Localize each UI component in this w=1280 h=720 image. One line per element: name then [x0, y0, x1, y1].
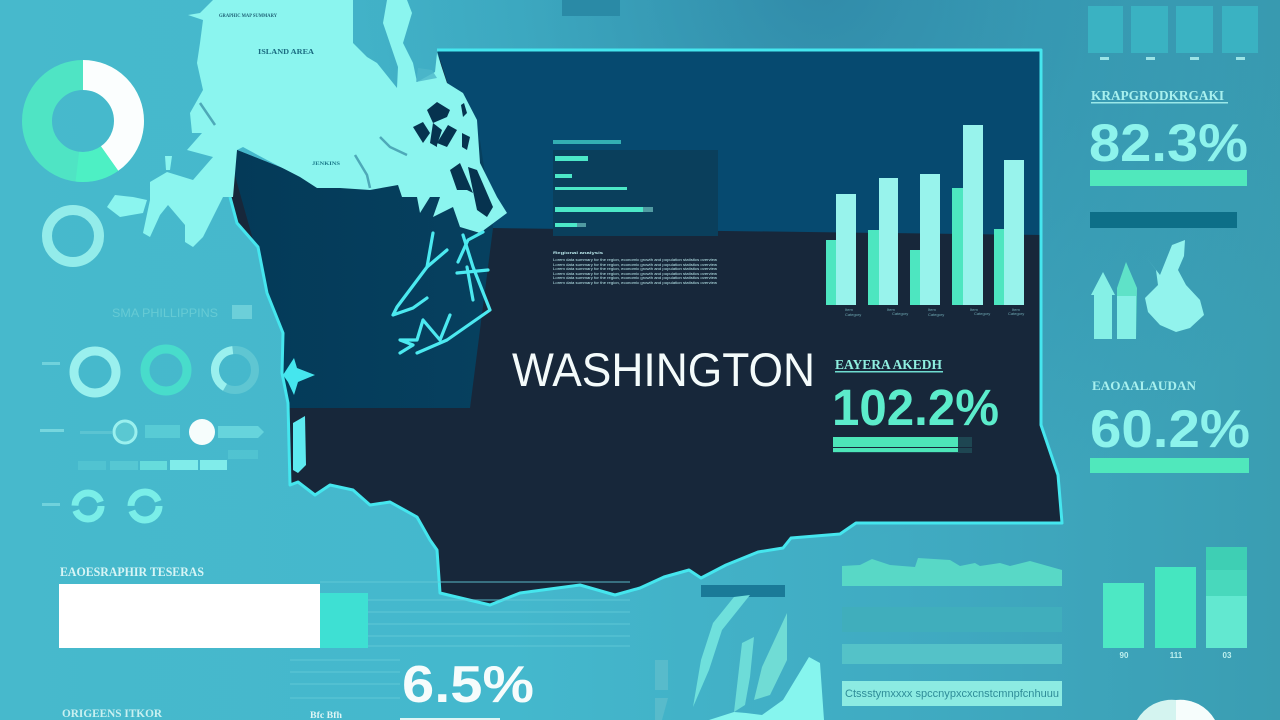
stat label: KRAPGRODKRGAKI — [1091, 89, 1224, 104]
stat value: 102.2% — [832, 379, 999, 436]
donut: large — [37, 75, 129, 167]
map region: west blue — [225, 140, 493, 408]
section heading left — [112, 305, 252, 320]
paragraph text: Lorem data summary for the region, economic growth and population statistics overview — [553, 281, 717, 285]
bar chart axis labels — [845, 307, 1024, 317]
stat bar — [833, 437, 972, 453]
teal bar — [320, 593, 368, 648]
paragraph text: Lorem data summary for the region, economic growth and population statistics overview — [553, 263, 717, 267]
label bar — [701, 585, 785, 597]
bar chart axis labels: Item — [887, 307, 895, 312]
paragraph text: Lorem data summary for the region, economic growth and population statistics overview — [553, 267, 717, 271]
stat value: 82.3% — [1089, 114, 1248, 173]
right top cards — [1088, 6, 1258, 60]
paragraph text: Lorem data summary for the region, economic growth and population statistics overview — [553, 276, 717, 280]
paragraph text: Lorem data summary for the region, economic growth and population statistics overview — [553, 258, 717, 262]
row label — [42, 362, 60, 365]
white bar heading: EAOESRAPHIR TESERAS — [60, 564, 204, 579]
segmented bar — [78, 450, 258, 470]
small chip — [232, 305, 252, 319]
stat: 6.5 percent: 6.5% — [402, 656, 534, 714]
dark bar — [1090, 212, 1237, 228]
puget sound fjord lines — [393, 232, 490, 353]
bar labels: 03 — [1223, 651, 1232, 660]
bar labels: 111 — [1170, 651, 1183, 660]
map region: north blue — [437, 50, 1041, 235]
land: label small: GRAPHIC MAP SUMMARY — [219, 14, 277, 19]
bar chart axis labels: Item — [928, 307, 936, 312]
map light land — [709, 657, 824, 720]
land: small island — [107, 195, 147, 217]
faint band — [842, 607, 1062, 632]
text band — [842, 681, 1062, 706]
faint rows — [290, 582, 630, 698]
bar chart axis labels: Item — [845, 307, 853, 312]
bar chart axis labels: Category — [845, 312, 861, 317]
bar chart axis labels: Category — [892, 311, 908, 316]
land: rivers — [200, 103, 407, 188]
donut: secondary — [47, 210, 99, 262]
paragraph text: Lorem data summary for the region, economic growth and population statistics overview — [553, 272, 717, 276]
progress row with circles — [40, 419, 264, 445]
stat bar — [1090, 170, 1247, 186]
map strip two — [734, 637, 754, 712]
horizontal bars title — [553, 140, 621, 144]
map strip one — [693, 595, 750, 707]
estuary: Grays Harbor — [283, 358, 315, 395]
icon: map blob — [1145, 240, 1204, 332]
land: northern coast and island — [107, 0, 507, 247]
chart: vertical grouped bars — [826, 125, 1024, 317]
bottom right bar chart — [1103, 547, 1247, 660]
stat value: 60.2% — [1090, 400, 1250, 459]
coast outline — [230, 50, 1062, 605]
donut pair — [42, 492, 159, 520]
bar labels: 90 — [1120, 651, 1129, 660]
stat label: EAYERA AKEDH — [835, 358, 942, 373]
bar chart axis labels: Category — [928, 312, 944, 317]
pie bottom right — [1137, 700, 1215, 720]
bottom center panels — [842, 558, 1062, 706]
icon: arrows and blob — [1091, 240, 1204, 339]
white bar block — [59, 564, 368, 648]
small fragments — [655, 660, 668, 720]
stat underline — [835, 371, 943, 372]
stat bar — [1090, 458, 1249, 473]
card captions — [1100, 57, 1245, 60]
bar chart axis labels: Category — [1008, 311, 1024, 316]
label underline — [1091, 102, 1228, 104]
bar labels — [1120, 651, 1232, 660]
top center tab — [562, 0, 620, 16]
text in band: Ctssstymxxxx spccnypxcxcnstcmnpfcnhuuu — [845, 688, 1059, 700]
white bar — [59, 584, 320, 648]
land: label south: JENKINS — [312, 162, 340, 167]
stat label: EAOAALAUDAN — [1092, 378, 1197, 393]
bar row tails — [577, 207, 653, 227]
paragraph text — [553, 251, 717, 285]
small label: Bfc Bfh — [310, 710, 342, 720]
land: islet — [165, 156, 172, 170]
footer heading left: ORIGEENS ITKOR — [62, 706, 162, 720]
bar chart axis labels: Item — [970, 307, 978, 312]
mid band — [842, 644, 1062, 664]
bar chart axis labels: Category — [974, 311, 990, 316]
panel: Washington state map — [225, 50, 1062, 605]
land: label region: ISLAND AREA — [258, 48, 314, 56]
stat block: 60.2 percent — [1090, 378, 1250, 473]
section heading left: SMA PHILLIPPINS — [112, 306, 218, 320]
stat block: center right — [832, 358, 999, 453]
area chart — [842, 558, 1062, 586]
stat block: 82.3 percent — [1089, 89, 1248, 186]
underline bar — [400, 718, 500, 720]
bottom map — [655, 585, 824, 720]
title: WASHINGTON — [512, 343, 815, 396]
donut row — [74, 343, 262, 397]
san juan islands — [413, 102, 493, 217]
land: inlet mark — [416, 68, 437, 82]
paragraph text: Regional analysis — [553, 251, 603, 255]
bar rows — [555, 156, 643, 227]
estuary: Willapa Bay — [293, 416, 306, 473]
bar chart axis labels: Item — [1012, 307, 1020, 312]
chart: horizontal bars — [553, 140, 718, 236]
map strip three — [754, 613, 787, 700]
